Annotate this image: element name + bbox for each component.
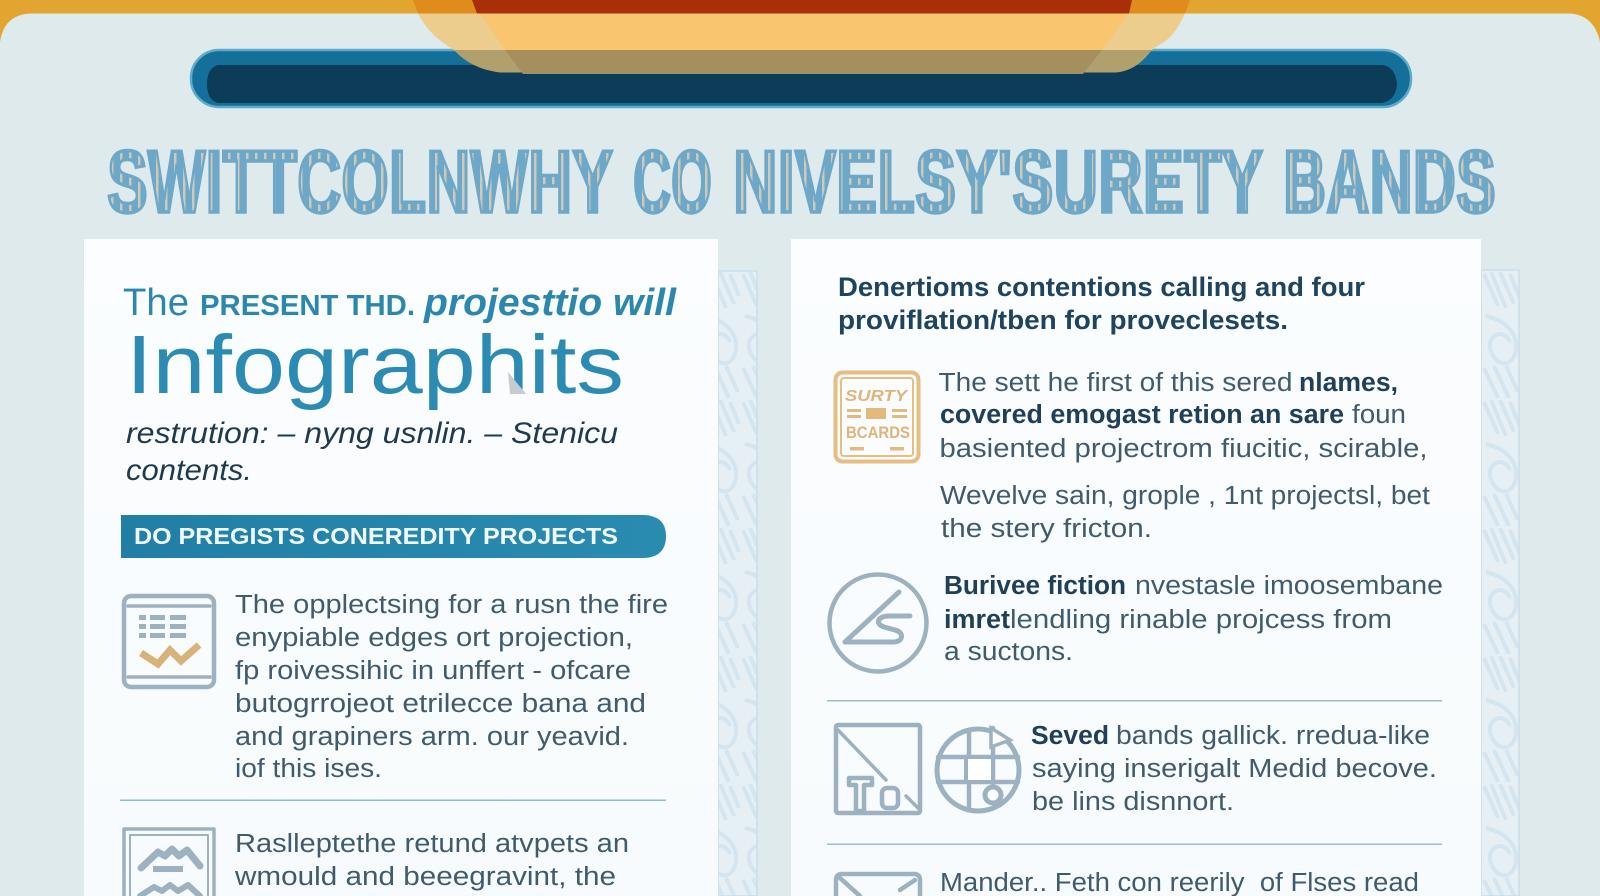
text block 1: butogrrojeot etrilecce bana and bbox=[235, 690, 646, 718]
icon: landscape frame bbox=[124, 829, 214, 896]
text block 1: fp roivessihic in unffert - ofcare bbox=[235, 657, 631, 685]
icon: globe bbox=[937, 728, 1019, 811]
subtitle line: The bbox=[123, 282, 189, 324]
text block: surety: nlames, bbox=[1299, 369, 1398, 397]
text block 1: enypiable edges ort projection, bbox=[235, 624, 633, 652]
text block: surety: The sett he first of this sered bbox=[938, 369, 1292, 397]
text block: bands bbox=[1031, 722, 1437, 816]
text block 2: Raslleptethe retund atvpets an bbox=[235, 830, 629, 858]
subtitle line: projesttio will bbox=[423, 282, 677, 324]
right heading: Denertioms contentions calling and four bbox=[838, 272, 1365, 302]
text block: fiction: nvestasle imoosembane bbox=[1135, 572, 1443, 600]
text block: bands: Seved bbox=[1031, 722, 1109, 750]
title: BANDS bbox=[1283, 132, 1496, 231]
text block: surety bbox=[938, 369, 1430, 543]
text block: fiction: Burivee fiction bbox=[944, 572, 1126, 600]
text block: surety: the stery fricton. bbox=[941, 515, 1152, 543]
icon: circle angle bbox=[830, 574, 926, 672]
text block: bands: bands gallick. rredua-like bbox=[1116, 722, 1430, 750]
subtitle line bbox=[123, 282, 677, 324]
text block 1: iof this ises. bbox=[235, 755, 382, 783]
intro text: restrution: – nyng usnlin. – Stenicu bbox=[126, 417, 618, 450]
icon: surety card: BCARDS bbox=[846, 423, 910, 442]
text block: bands: saying inserigalt Medid becove. bbox=[1032, 755, 1437, 783]
decorative strip right bbox=[1481, 270, 1519, 896]
text block: surety: covered emogast retion an sare bbox=[940, 401, 1344, 429]
intro text bbox=[126, 417, 618, 487]
text block: surety: foun bbox=[1352, 401, 1406, 429]
right heading: proviflation/tben for proveclesets. bbox=[838, 305, 1288, 335]
text block 1: The opplectsing for a rusn the fire bbox=[235, 591, 668, 619]
panel: right bbox=[791, 239, 1481, 896]
heading artifact bbox=[508, 372, 526, 394]
right heading bbox=[838, 272, 1365, 335]
header gold band bbox=[0, 0, 1600, 60]
intro text: contents. bbox=[126, 454, 252, 487]
sun dome top bbox=[413, 0, 1190, 74]
text block: surety: basiented projectrom fiucitic, scirable, bbox=[940, 435, 1428, 463]
icon: envelope bbox=[836, 874, 920, 896]
panel: left bbox=[84, 239, 718, 896]
icon: surety card: SURTY bbox=[845, 388, 909, 405]
icon: surety card bbox=[836, 372, 918, 462]
icon: square diagram bbox=[836, 725, 920, 813]
text block 1: and grapiners arm. our yeavid. bbox=[235, 723, 629, 751]
section band: DO PREGISTS CONEREDITY PROJECTS bbox=[134, 523, 618, 549]
section band bbox=[121, 515, 666, 558]
text block: surety: Wevelve sain, grople , 1nt projectsl, bet bbox=[940, 482, 1430, 510]
text block: bands: be lins disnnort. bbox=[1032, 788, 1234, 816]
text block: fiction: imret bbox=[944, 606, 1011, 634]
icon: chart window bbox=[124, 596, 214, 687]
title bbox=[107, 132, 1496, 231]
big heading: Infographits bbox=[126, 318, 624, 411]
header bar bbox=[191, 50, 1411, 107]
decorative strip left bbox=[718, 271, 757, 896]
subtitle line: PRESENT THD. bbox=[200, 290, 415, 322]
text block 2 bbox=[234, 830, 629, 891]
text block: fiction: a suctons. bbox=[944, 638, 1073, 666]
text block 1 bbox=[235, 591, 668, 783]
text block: fiction: lendling rinable projcess from bbox=[1010, 606, 1392, 634]
title: NIVELSY'SURETY bbox=[733, 132, 1263, 231]
title: CO bbox=[633, 132, 712, 231]
text block: fiction bbox=[944, 572, 1443, 666]
title: SWITTCOLNWHY bbox=[107, 132, 613, 231]
text block 2: wmould and beeegravint, the bbox=[234, 863, 616, 891]
